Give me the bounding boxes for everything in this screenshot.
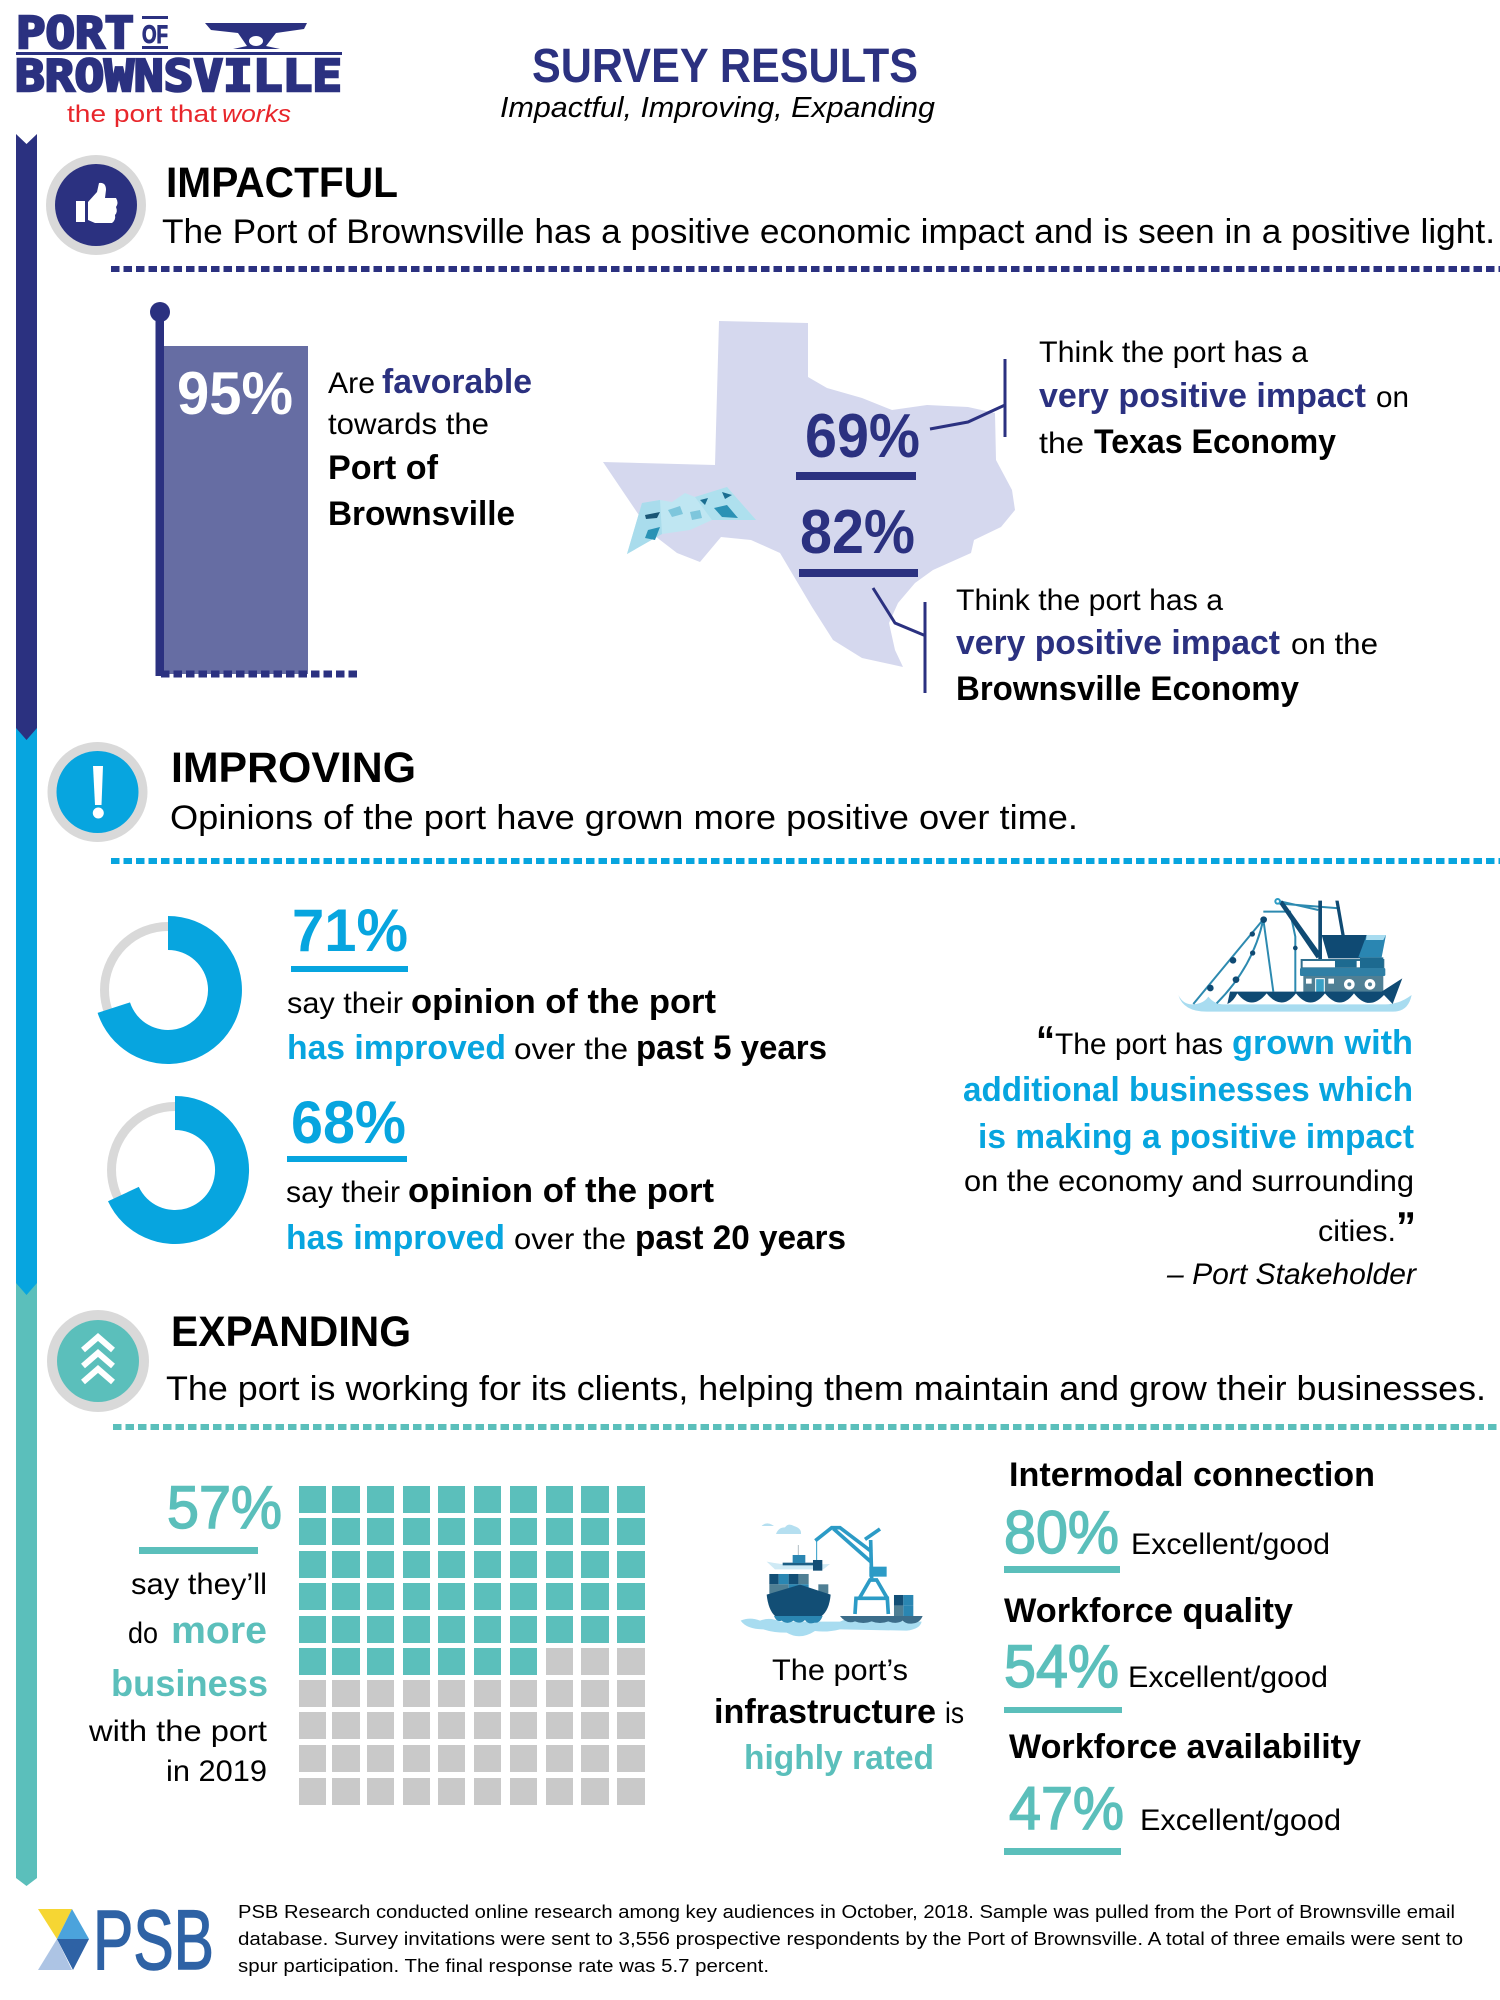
quote: port stakeholder: additional businesses which <box>963 1071 1413 1109</box>
stat: 68% improved: say their <box>286 1176 400 1209</box>
heading: expanding <box>166 1308 1486 1408</box>
stat: 68% improved: 68% <box>291 1089 406 1156</box>
stat: 71% improved: over the <box>514 1033 628 1066</box>
icon: chevrons up <box>47 1310 149 1412</box>
stat: 57% more business: 57% <box>167 1474 282 1541</box>
text: favorable description: towards the <box>328 408 489 441</box>
text: texas economy: Think the port has a <box>1039 336 1308 369</box>
stat: 57% more business: do <box>128 1617 158 1650</box>
heading: impactful: The Port of Brownsville has a positive economic impact and is seen in a positive light. <box>162 213 1495 251</box>
icon: fishing boat <box>1178 898 1412 1012</box>
icon: exclamation <box>48 742 148 842</box>
callout: brownsville economy leader <box>873 588 926 693</box>
text: texas economy: very positive impact <box>1039 377 1366 415</box>
stat: intermodal connection 80%: Intermodal connection <box>1009 1456 1375 1494</box>
quote: port stakeholder <box>963 1017 1417 1291</box>
text: favorable description: Brownsville <box>328 495 515 533</box>
heading: improving: Opinions of the port have grown more positive over time. <box>170 799 1078 837</box>
stat: 71% improved <box>287 897 827 1067</box>
logo: Port of Brownsville: BROWNSVILLE <box>15 51 342 102</box>
stat: workforce availability 47%: 47% <box>1009 1775 1124 1842</box>
stat: intermodal connection 80% <box>1004 1456 1375 1573</box>
stat: intermodal connection 80%: Excellent/good <box>1131 1528 1330 1561</box>
footnote: database. Survey invitations were sent to 3,556 prospective respondents by the Port of Brownsville. A total of three emails were sent to <box>238 1929 1463 1949</box>
text: favorable description: Are <box>328 367 375 400</box>
logo: Port of Brownsville <box>15 8 342 128</box>
stat: 71% improved: 71% <box>292 897 408 964</box>
stat: 69%: 69% <box>805 402 920 471</box>
heading: improving <box>170 744 1078 837</box>
panel: 95% favorable bar <box>150 302 358 676</box>
quote: port stakeholder: cities. <box>1318 1215 1396 1248</box>
text: brownsville economy <box>956 584 1378 708</box>
text: texas economy: Texas Economy <box>1094 423 1336 461</box>
stat: 68% improved <box>286 1089 846 1257</box>
text: infrastructure highly rated: infrastructure <box>714 1693 936 1731</box>
text: favorable description: Port of <box>328 449 439 487</box>
footnote <box>238 1902 1463 1976</box>
logo: Port of Brownsville: PORT <box>16 8 134 59</box>
icon: folded map <box>627 487 756 554</box>
waffle chart: 57 of 100 <box>299 1486 645 1805</box>
logo: PSB: PSB <box>93 1893 214 1987</box>
stat: 68% improved: past 20 years <box>635 1219 846 1257</box>
stat: 57% more business: business <box>111 1663 268 1704</box>
quote: port stakeholder: The port has <box>1055 1028 1223 1061</box>
stat: 71% improved: past 5 years <box>636 1029 827 1067</box>
texas map <box>603 321 1015 667</box>
text: brownsville economy: on the <box>1291 628 1378 661</box>
heading: impactful <box>162 159 1495 251</box>
left timeline bar <box>16 134 37 1886</box>
quote: port stakeholder: grown with <box>1232 1024 1413 1062</box>
panel: 95% favorable bar: 95% <box>177 360 293 427</box>
quote: port stakeholder: – Port Stakeholder <box>1166 1258 1417 1291</box>
logo: Port of Brownsville: OF <box>142 21 168 49</box>
logo: PSB <box>38 1893 214 1987</box>
text: texas economy <box>1039 336 1409 461</box>
title: SURVEY RESULTS <box>532 40 918 93</box>
text: texas economy: on <box>1376 381 1409 414</box>
stat: workforce quality 54%: 54% <box>1004 1633 1119 1700</box>
text: brownsville economy: very positive impact <box>956 624 1280 662</box>
stat: workforce quality 54%: Workforce quality <box>1004 1592 1293 1630</box>
heading: expanding: The port is working for its clients, helping them maintain and grow their businesses. <box>166 1370 1486 1408</box>
icon: thumbs up <box>46 155 146 255</box>
stat: workforce availability 47%: Excellent/good <box>1140 1804 1341 1837</box>
donut chart: 71% <box>98 916 242 1064</box>
stat: 57% more business: with the port <box>88 1715 268 1748</box>
quote: port stakeholder: on the economy and surrounding <box>964 1165 1414 1198</box>
stat: 71% improved: opinion of the port <box>411 983 716 1021</box>
text: brownsville economy: Brownsville Economy <box>956 670 1299 708</box>
stat: intermodal connection 80%: 80% <box>1004 1499 1119 1566</box>
icon: cargo ship and crane <box>741 1523 923 1636</box>
text: infrastructure highly rated: highly rated <box>744 1739 934 1777</box>
stat: 57% more business <box>88 1474 282 1788</box>
stat: workforce quality 54%: Excellent/good <box>1128 1661 1328 1694</box>
stat: 71% improved: say their <box>287 987 403 1020</box>
stat: 68% improved: has improved <box>286 1219 505 1257</box>
title <box>500 40 935 124</box>
heading: expanding: EXPANDING <box>171 1308 411 1356</box>
quote: port stakeholder: “ <box>1036 1017 1055 1064</box>
quote: port stakeholder: is making a positive impact <box>978 1118 1414 1156</box>
stat: workforce quality 54% <box>1004 1592 1328 1713</box>
stat: 82%: 82% <box>800 498 915 567</box>
stat: workforce availability 47%: Workforce availability <box>1009 1728 1361 1766</box>
stat: 57% more business: more <box>171 1610 267 1652</box>
text: favorable description <box>328 363 532 533</box>
text: infrastructure highly rated <box>714 1654 964 1777</box>
stat: 68% improved: over the <box>514 1223 626 1256</box>
stat: 68% improved: opinion of the port <box>408 1172 714 1210</box>
footnote: spur participation. The final response rate was 5.7 percent. <box>238 1956 769 1976</box>
logo: Port of Brownsville: works <box>222 101 291 128</box>
stat: 71% improved: has improved <box>287 1029 506 1067</box>
text: infrastructure highly rated: is <box>945 1697 964 1730</box>
stat: 57% more business: say they’ll <box>131 1568 267 1601</box>
title: Impactful, Improving, Expanding <box>500 92 935 124</box>
callout: texas economy leader <box>930 359 1005 437</box>
quote: port stakeholder: ” <box>1396 1203 1416 1250</box>
text: texas economy: the <box>1039 427 1084 460</box>
stat: 57% more business: in 2019 <box>166 1755 267 1788</box>
donut chart: 68% <box>108 1096 249 1244</box>
text: infrastructure highly rated: The port’s <box>772 1654 908 1687</box>
stat: workforce availability 47% <box>1004 1728 1361 1855</box>
text: brownsville economy: Think the port has a <box>956 584 1223 617</box>
heading: improving: IMPROVING <box>171 744 416 792</box>
logo: Port of Brownsville: the port that <box>67 101 217 128</box>
heading: impactful: IMPACTFUL <box>166 159 398 207</box>
footnote: PSB Research conducted online research among key audiences in October, 2018. Sample was pulled from the Port of Brownsville email <box>238 1902 1455 1922</box>
text: favorable description: favorable <box>382 363 532 401</box>
